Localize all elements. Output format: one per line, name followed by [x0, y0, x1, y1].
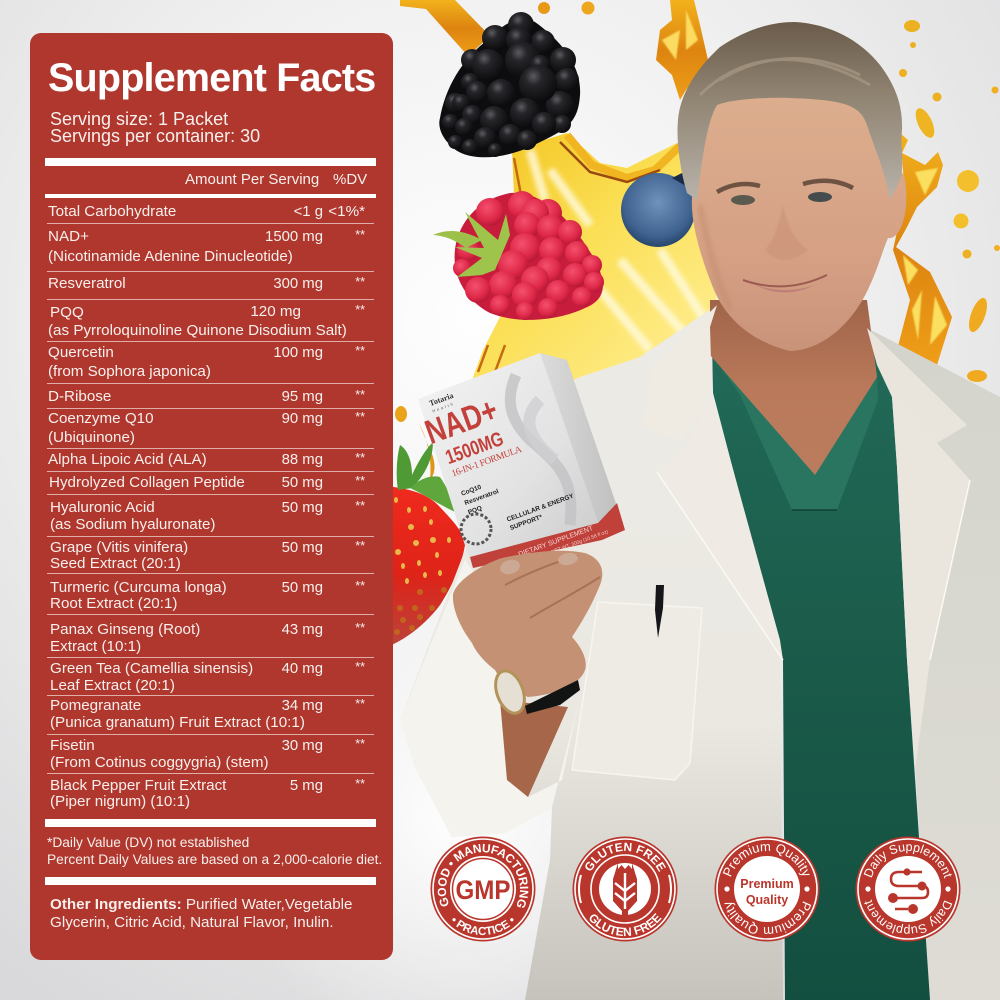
- row: NAD+: NAD+: [48, 228, 89, 245]
- doctor: lab coat: [400, 305, 1000, 1000]
- row: Black Pepper: 5 mg: [290, 778, 323, 794]
- row: D-Ribose: 95 mg: [282, 389, 323, 405]
- serving information: Servings per container: 30: [50, 126, 260, 146]
- badge: GMP: GMP: [456, 875, 510, 905]
- row: Fisetin: Fisetin: [50, 737, 95, 754]
- badge: premium quality: Premium Quality: [724, 901, 812, 934]
- row: Panax Ginseng: Panax Ginseng (Root): [50, 621, 200, 638]
- box label text: CELLULAR & ENERGY: [506, 493, 575, 524]
- badge: gluten free: GLUTEN FREE: [585, 842, 666, 872]
- row: Quercetin: Quercetin: [48, 344, 114, 361]
- badge: premium quality: [714, 836, 820, 942]
- row: Fisetin: [47, 734, 374, 774]
- daily value footnote: *Daily Value (DV) not established: [47, 835, 249, 850]
- row: D-Ribose: **: [355, 388, 365, 402]
- box label text: CoQ10: [460, 484, 483, 498]
- row: Grape: **: [355, 539, 365, 553]
- row: Quercetin: (from Sophora japonica): [48, 363, 211, 380]
- row: Green Tea: **: [355, 660, 365, 674]
- row: Grape: Seed Extract (20:1): [50, 555, 181, 572]
- daily value footnote: [47, 835, 382, 867]
- row: Hydrolyzed Collagen Peptide: Hydrolyzed Collagen Peptide: [49, 474, 245, 491]
- honey splash: top right of berries: [656, 0, 708, 100]
- daily value footnote: Percent Daily Values are based on a 2,000-calorie diet.: [47, 852, 382, 867]
- honey splash: main: [400, 0, 720, 380]
- row: Green Tea: Green Tea (Camellia sinensis): [50, 660, 253, 677]
- row: Black Pepper: [47, 773, 374, 814]
- row: Hydrolyzed Collagen Peptide: **: [355, 474, 365, 488]
- row: Resveratrol: [47, 271, 374, 300]
- badge: premium quality: Premium: [740, 877, 794, 891]
- box label text: Totaria: [428, 391, 455, 408]
- row: Grape: 50 mg: [282, 540, 323, 556]
- row: Total Carbohydrate: <1%*: [328, 203, 365, 220]
- product box: [416, 353, 625, 582]
- row: Pomegranate: (Punica granatum) Fruit Extract (10:1): [50, 714, 305, 731]
- row: Turmeric: 50 mg: [282, 580, 323, 596]
- row: Turmeric: Root Extract (20:1): [50, 595, 177, 612]
- wristwatch: [490, 667, 580, 717]
- other ingredients: Glycerin, Citric Acid, Natural Flavor, Inulin.: [50, 914, 334, 930]
- coat pocket with pen: [572, 585, 702, 780]
- row: Alpha Lipoic Acid: **: [355, 451, 365, 465]
- badge: GMP: [430, 836, 536, 942]
- row: PQQ: 120 mg: [250, 303, 301, 320]
- row: Hydrolyzed Collagen Peptide: [47, 471, 374, 495]
- row: Coenzyme Q10: **: [355, 410, 365, 424]
- row: Panax Ginseng: [47, 614, 374, 658]
- row: PQQ: PQQ: [50, 304, 84, 321]
- raspberry: [433, 191, 604, 320]
- row: Resveratrol: 300 mg: [273, 276, 323, 292]
- row: Black Pepper: (Piper nigrum) (10:1): [50, 793, 190, 810]
- badge: premium quality: Quality: [746, 893, 788, 907]
- row: Pomegranate: **: [355, 697, 365, 711]
- row: NAD+: [47, 223, 374, 272]
- heavy divider bottom: [45, 819, 376, 827]
- row: Panax Ginseng: **: [355, 621, 365, 635]
- badge: gluten free: GLUTEN FREE: [590, 913, 662, 936]
- other ingredients: [50, 896, 352, 930]
- row: Black Pepper: **: [355, 777, 365, 791]
- row: Alpha Lipoic Acid: [47, 448, 374, 472]
- row: Coenzyme Q10: [47, 408, 374, 449]
- badge: GMP: • PRACTICE •: [452, 918, 514, 936]
- badge: daily supplement: Daily Supplement: [864, 900, 952, 934]
- row: Quercetin: **: [355, 344, 365, 358]
- badge: GMP: GOOD • MANUFACTURING: [438, 844, 528, 908]
- serving information: Serving size: 1 Packet: [50, 109, 228, 129]
- row: Resveratrol: **: [355, 275, 365, 289]
- blackberry: [439, 12, 580, 157]
- column headers: %DV: [333, 171, 367, 188]
- row: Total Carbohydrate: <1 g: [294, 204, 323, 220]
- box label text: DIETARY SUPPLEMENT: [518, 525, 595, 559]
- heavy divider top: [45, 158, 376, 166]
- row: Pomegranate: Pomegranate: [50, 697, 141, 714]
- row: Grape: Grape (Vitis vinifera): [50, 539, 188, 556]
- doctor: collar and lapels: [642, 305, 970, 770]
- box label text: 16-IN-1 FORMULA: [451, 445, 524, 479]
- column headers: Amount Per Serving: [185, 171, 319, 188]
- row: Quercetin: [47, 341, 374, 384]
- row: Turmeric: **: [355, 579, 365, 593]
- badge: premium quality: Premium Quality: [722, 844, 810, 877]
- row: Alpha Lipoic Acid: Alpha Lipoic Acid (ALA): [48, 451, 207, 468]
- box label text: 30 Packets | NET WT. 300g (10.58 fl oz): [524, 529, 610, 565]
- serving information: [50, 109, 260, 146]
- row: D-Ribose: D-Ribose: [48, 388, 111, 405]
- row: NAD+: **: [355, 228, 365, 242]
- row: Pomegranate: 34 mg: [282, 698, 323, 714]
- doctor: neck: [710, 300, 877, 475]
- row: Hyaluronic Acid: 50 mg: [282, 500, 323, 516]
- panel: supplement facts background: [30, 33, 393, 960]
- heavy divider lower: [45, 877, 376, 885]
- row: Hyaluronic Acid: Hyaluronic Acid: [50, 499, 155, 516]
- box label text: SUPPORT*: [509, 514, 544, 532]
- row: Black Pepper: Black Pepper Fruit Extract: [50, 777, 226, 794]
- title: Supplement Facts: [48, 56, 375, 100]
- box label text: NAD+: [420, 391, 503, 452]
- row: NAD+: (Nicotinamide Adenine Dinucleotide): [48, 248, 293, 265]
- doctor: head: [677, 22, 906, 351]
- row: Panax Ginseng: 43 mg: [282, 622, 323, 638]
- row: Coenzyme Q10: 90 mg: [282, 411, 323, 427]
- row: Hyaluronic Acid: [47, 494, 374, 537]
- box label text: [416, 357, 610, 582]
- row: Green Tea: Leaf Extract (20:1): [50, 677, 175, 694]
- header divider: [45, 194, 376, 198]
- row: Fisetin: **: [355, 737, 365, 751]
- box label text: Health: [431, 401, 455, 414]
- other ingredients: Other Ingredients: Purified Water,Vegetable: [50, 896, 352, 913]
- blueberry: [621, 170, 695, 247]
- badge: daily supplement: [856, 836, 960, 942]
- row: Hydrolyzed Collagen Peptide: 50 mg: [282, 475, 323, 491]
- row: Fisetin: 30 mg: [282, 738, 323, 754]
- row: Turmeric: [47, 573, 374, 615]
- forearm and hand holding box: [453, 551, 602, 797]
- row: Resveratrol: Resveratrol: [48, 275, 126, 292]
- row: PQQ: **: [355, 303, 365, 317]
- row: Green Tea: 40 mg: [282, 661, 323, 677]
- row: Quercetin: 100 mg: [273, 345, 323, 361]
- row: Coenzyme Q10: (Ubiquinone): [48, 429, 135, 446]
- box label text: 1500MG: [443, 428, 507, 469]
- badge: gluten free: [572, 836, 678, 942]
- doctor: scrubs: [712, 340, 930, 1000]
- row: PQQ: (as Pyrroloquinoline Quinone Disodium Salt): [48, 322, 347, 339]
- strawberry: [385, 442, 465, 648]
- row: Fisetin: (From Cotinus coggygria) (stem): [50, 754, 269, 771]
- row: Grape: [47, 536, 374, 574]
- badge: daily supplement: Daily Supplement: [864, 844, 952, 878]
- row: Green Tea: [47, 657, 374, 696]
- row: Panax Ginseng: Extract (10:1): [50, 638, 141, 655]
- box label text: PQQ: [467, 505, 483, 516]
- row: Total Carbohydrate: [48, 203, 365, 220]
- row: Pomegranate: [47, 695, 374, 735]
- row: D-Ribose: [47, 383, 374, 409]
- row: Coenzyme Q10: Coenzyme Q10: [48, 410, 154, 427]
- row: Turmeric: Turmeric (Curcuma longa): [50, 579, 227, 596]
- row: Hyaluronic Acid: **: [355, 499, 365, 513]
- box label text: Resveratrol: [464, 488, 500, 507]
- row: Alpha Lipoic Acid: 88 mg: [282, 452, 323, 468]
- row: Total Carbohydrate: Total Carbohydrate: [48, 203, 176, 220]
- row: Hyaluronic Acid: (as Sodium hyaluronate): [50, 516, 215, 533]
- honey splash: right column with droplets: [395, 2, 1000, 480]
- row: NAD+: 1500 mg: [265, 229, 323, 245]
- row: PQQ: [47, 299, 374, 342]
